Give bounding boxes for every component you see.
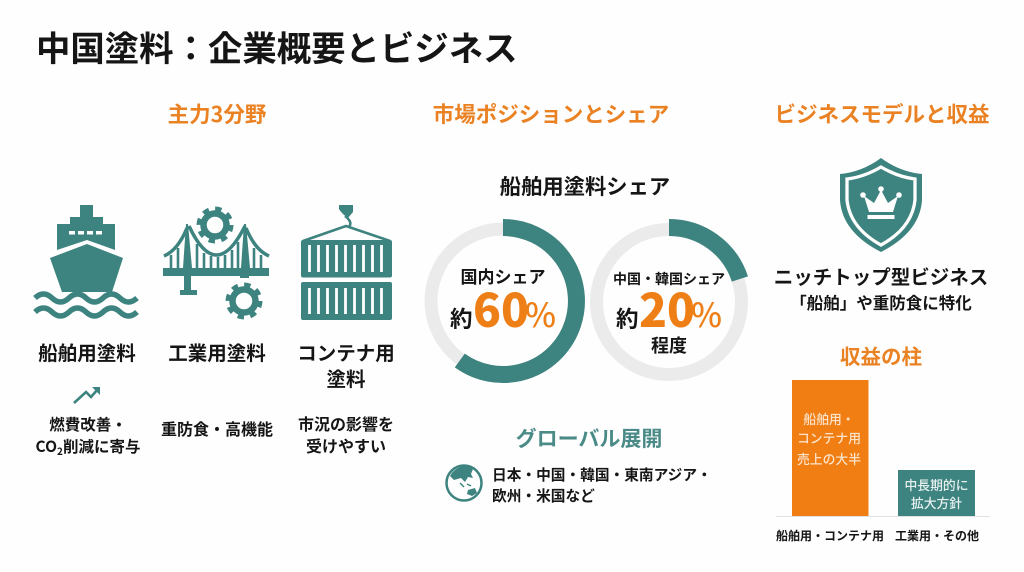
panel: business model and revenue [774,98,990,544]
donut value: about 60%: 約 [450,302,473,334]
bar: marine and container: 売上の大半 [797,449,861,468]
bar: marine and container: コンテナ用 [797,428,861,447]
segment label: container coatings: コンテナ用 [297,337,395,366]
segment label: container coatings: 塗料 [326,363,366,392]
donut label: domestic: 国内シェア [460,263,546,288]
bar chart: revenue pillars [776,380,990,544]
text: specialization: 「船舶」や重防食に特化 [790,290,972,314]
bar: marine and container [792,380,868,516]
donut value: about 20%: % [691,289,722,337]
icon: bridge with gears [163,209,269,317]
donut value: about 20%: 20 [639,275,695,341]
bar: industrial and other: 拡大方針 [911,493,962,512]
heading: main segments: 主力3分野 [168,98,267,129]
donut chart: China and Korea share [596,227,742,374]
note: marine coatings: 削減に寄与 [63,435,140,457]
note: container coatings: 市況の影響を [298,411,394,435]
note: marine coatings: 燃費改善・ [49,413,127,435]
donut label: China and Korea: 中国・韓国シェア [613,269,725,289]
bar: marine and container: 船舶用・ [803,409,855,428]
icon: rising arrow [74,387,100,403]
note: container coatings: 受けやすい [306,433,386,457]
segment label: marine coatings: 船舶用塗料 [38,337,136,366]
axis label: marine and container: 船舶用・コンテナ用 [776,527,884,544]
note: industrial coatings: 重防食・高機能 [161,416,273,440]
heading: business model: ビジネスモデルと収益 [774,98,990,129]
donut chart: domestic share [431,228,576,374]
text: regions: 欧州・米国など [492,485,595,506]
icon: globe [446,466,482,500]
donut value: about 60% [450,275,556,341]
note: marine coatings: CO [36,435,140,458]
bar: industrial and other [898,470,975,516]
bar: industrial and other: 中長期的に [905,475,968,494]
text: niche top business: ニッチトップ型ビジネス [774,261,988,290]
text: regions: 日本・中国・韓国・東南アジア・ [492,464,712,485]
donut value: about 20% [616,275,722,341]
donut value: about 20%: 約 [616,302,639,334]
icon: shield with crown [840,158,922,252]
segment label: industrial coatings: 工業用塗料 [168,337,266,366]
subheading: marine share: 船舶用塗料シェア [500,170,670,201]
heading: market position: 市場ポジションとシェア [433,98,669,129]
heading: revenue pillars: 収益の柱 [840,340,922,370]
title: 中国塗料：企業概要とビジネス [36,21,517,71]
axis label: industrial and other: 工業用・その他 [895,527,979,544]
icon: ship [35,205,137,316]
donut value: about 60%: % [525,289,556,337]
note: marine coatings: 2 [57,443,63,458]
donut note: approximately: 程度 [651,332,687,358]
heading: global expansion: グローバル展開 [516,423,662,453]
icon: containers on crane hook [301,205,392,320]
donut value: about 60%: 60 [473,275,529,341]
panel: market position and share [431,98,742,506]
panel: main segments [35,98,395,458]
